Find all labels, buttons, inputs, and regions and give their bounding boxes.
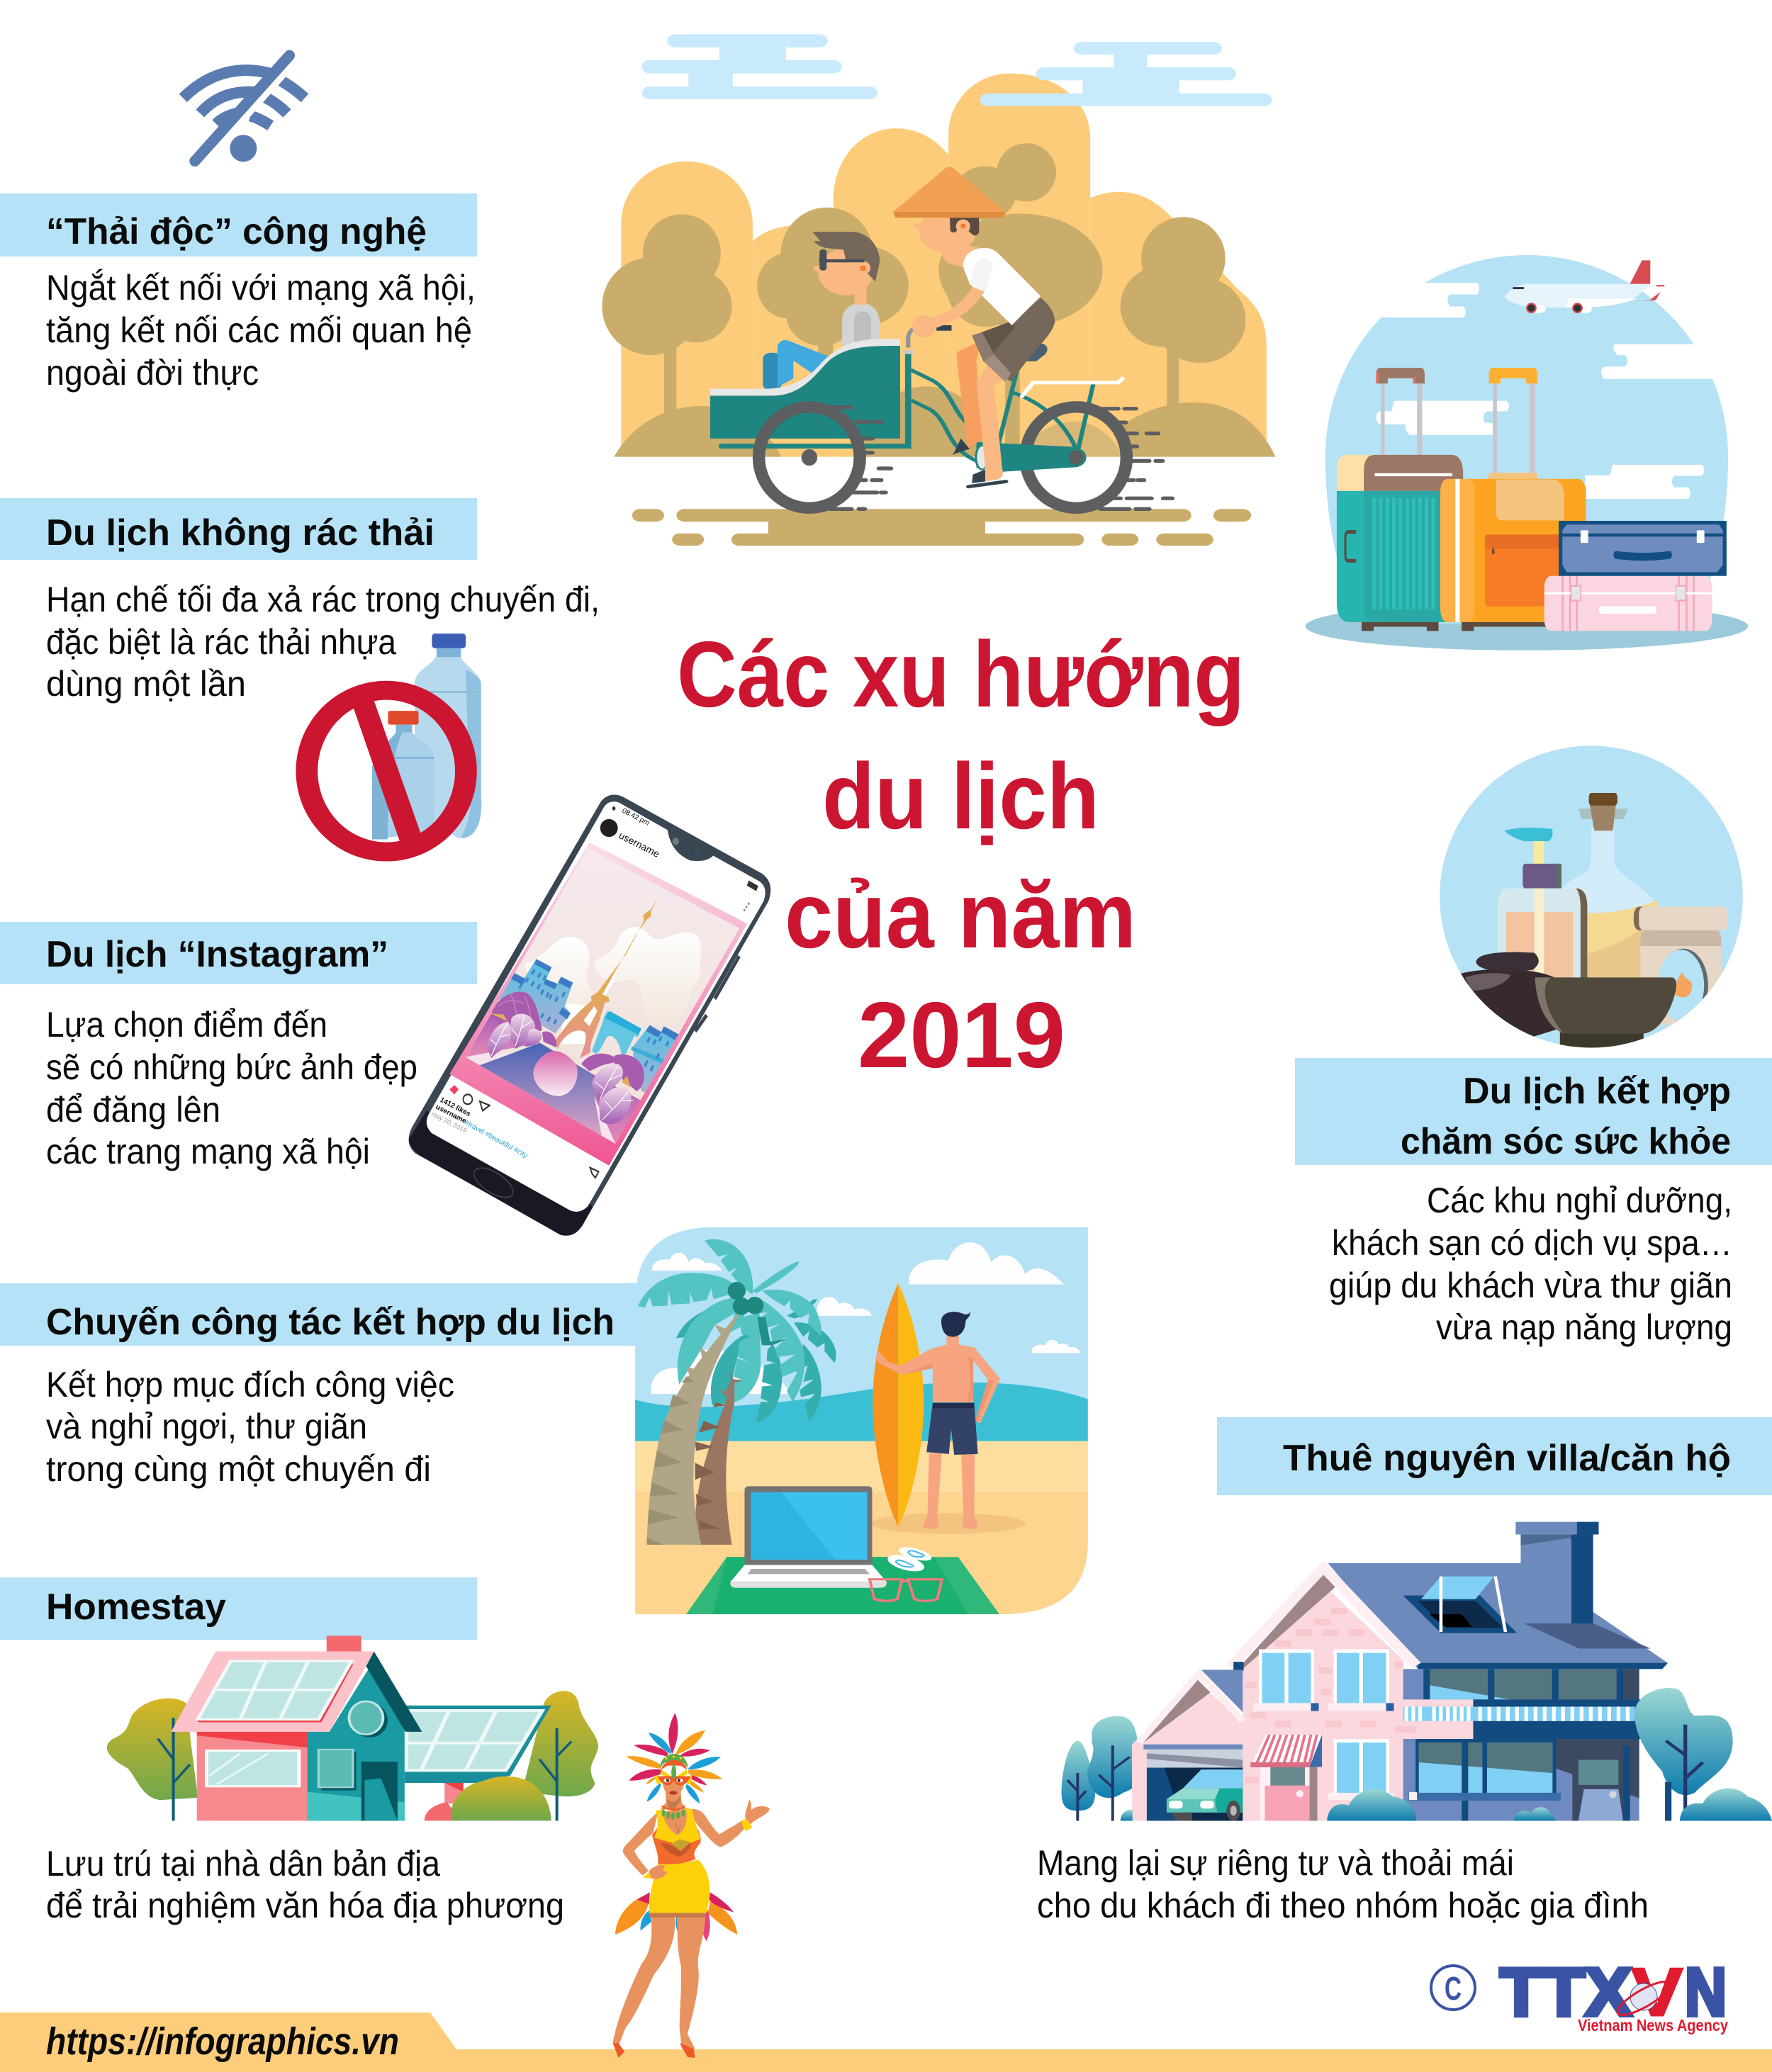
plane (1505, 260, 1664, 313)
footer url: https://infographics.vn (46, 2020, 399, 2063)
panel: homestay (0, 1577, 564, 1925)
skylight (1403, 1577, 1517, 1633)
logo: TTXVN: Vietnam News Agency (1578, 2016, 1728, 2034)
heading: Homestay (46, 1587, 226, 1628)
body text: để trải nghiệm văn hóa địa phương (46, 1886, 564, 1925)
body text (46, 1365, 454, 1489)
flip flops (885, 1544, 933, 1575)
blue case (1559, 521, 1727, 576)
clouds (1352, 272, 1736, 499)
roof (171, 1651, 374, 1732)
phone photo: Paris scene (461, 845, 744, 1153)
body text (1329, 1181, 1732, 1347)
icon: no plastic bottles (296, 634, 481, 862)
body text: ngoài đời thực (46, 353, 259, 393)
main title: của năm (785, 863, 1136, 967)
pump bottle (1498, 828, 1587, 980)
cyclo body (710, 339, 900, 439)
heading: “Thải độc” công nghệ (46, 211, 427, 252)
body text: tăng kết nối các mối quan hệ (46, 310, 472, 350)
body text: khách sạn có dịch vụ spa… (1332, 1223, 1732, 1263)
footer bar (0, 2012, 1772, 2072)
foreground trees (602, 143, 1275, 457)
heading: Du lịch “Instagram” (46, 934, 388, 975)
illustration: smartphone: username (434, 1103, 468, 1125)
candle burner (1634, 907, 1728, 1025)
passenger (763, 232, 880, 390)
roof (1328, 1522, 1668, 1669)
body text: và nghỉ ngơi, thư giãn (46, 1407, 367, 1446)
glasses (870, 1580, 942, 1601)
body text: Các khu nghỉ dưỡng, (1427, 1181, 1732, 1220)
panel: business leisure (0, 1283, 652, 1489)
icon: wifi off (183, 55, 305, 162)
trees left (1062, 1716, 1146, 1820)
main title: 2019 (858, 983, 1065, 1087)
clouds (651, 1242, 1080, 1394)
logo: TTXVN (1500, 1954, 1728, 2034)
heading band (1295, 1058, 1772, 1165)
illustration: spa products (1440, 745, 1743, 1048)
illustration: villa (1062, 1522, 1772, 1820)
illustration: beach with laptop (624, 1219, 1104, 1628)
panel: villa rental (1037, 1417, 1772, 1925)
main right block (1403, 1669, 1639, 1820)
bicycle frame (722, 329, 1123, 461)
body text: giúp du khách vừa thư giãn (1329, 1266, 1732, 1305)
chimney (327, 1635, 361, 1651)
upper glass (1423, 1669, 1639, 1699)
feathers (626, 1713, 722, 1803)
teal suitcase (1337, 368, 1463, 631)
body text: đặc biệt là rác thải nhựa (46, 622, 396, 662)
door and awning (1250, 1735, 1322, 1820)
body text: Lưu trú tại nhà dân bản địa (46, 1844, 440, 1884)
palm fronds (638, 1239, 836, 1422)
heading: chăm sóc sức khỏe (1401, 1121, 1731, 1162)
coconuts (728, 1282, 763, 1315)
heading (1401, 1071, 1731, 1162)
stones (1460, 952, 1557, 1037)
neck and face (661, 1777, 686, 1809)
logo: copyright mark: C (1445, 1970, 1462, 2007)
illustration: smartphone: may 20, 2019 (430, 1110, 468, 1134)
heading: Thuê nguyên villa/căn hộ (1283, 1438, 1731, 1479)
trees and bushes (1121, 1688, 1772, 1820)
legs (613, 1913, 705, 2049)
orange suitcase (1440, 368, 1586, 631)
logo: TTXVN: V (1632, 1954, 1683, 2030)
body text: trong cùng một chuyến đi (46, 1449, 431, 1489)
arms (623, 1800, 770, 1876)
body text (46, 1844, 564, 1925)
body text: cho du khách đi theo nhóm hoặc gia đình (1037, 1886, 1649, 1925)
panel: instagram travel (0, 922, 477, 1171)
trees (107, 1691, 598, 1820)
panel: wellness travel (1295, 1058, 1772, 1347)
pink case (1544, 576, 1712, 631)
balcony (1403, 1699, 1644, 1739)
body text: sẽ có những bức ảnh đẹp (46, 1047, 417, 1087)
illustration: cyclo scene (602, 34, 1275, 546)
skirt feathers (615, 1892, 737, 1941)
body text: Kết hợp mục đích công việc (46, 1365, 454, 1404)
body text (46, 268, 476, 393)
illustration: smartphone: 1412 likes (439, 1096, 472, 1118)
body text: các trang mạng xã hội (46, 1132, 370, 1171)
bowl (1535, 977, 1676, 1048)
body text: Ngắt kết nối với mạng xã hội, (46, 268, 476, 308)
heading: Du lịch kết hợp (1463, 1071, 1731, 1112)
body text: Lựa chọn điểm đến (46, 1005, 327, 1045)
wheels (753, 401, 1133, 514)
logo: TTXVN: TTX (1500, 1954, 1632, 2030)
heading band (0, 922, 477, 984)
body text: vừa nạp năng lượng (1436, 1307, 1732, 1347)
heading band (0, 193, 477, 257)
body text: Hạn chế tối đa xả rác trong chuyến đi, (46, 580, 600, 619)
body text: để đăng lên (46, 1090, 220, 1130)
main title: Các xu hướng (677, 622, 1245, 726)
house walls (197, 1651, 422, 1820)
logo: TTXVN: N (1685, 1954, 1727, 2030)
mat (686, 1557, 999, 1614)
speed lines (830, 407, 1172, 509)
palm trunks (647, 1313, 743, 1545)
dancer upper body (623, 1713, 770, 1879)
panel: digital detox (0, 193, 477, 393)
lower front (1408, 1739, 1639, 1820)
pink facade (1230, 1567, 1416, 1820)
road (632, 509, 1251, 546)
laptop (730, 1486, 887, 1588)
body text (46, 580, 600, 704)
illustration: smartphone (409, 794, 770, 1236)
body text: Mang lại sự riêng tư và thoải mái (1037, 1843, 1514, 1883)
heading band (1217, 1417, 1772, 1495)
heading band (0, 1283, 652, 1346)
main title (677, 622, 1245, 1087)
panel: zero waste travel (0, 498, 600, 704)
illustration: homestay house (107, 1635, 598, 1820)
heading band (0, 1577, 477, 1640)
chain guard (977, 442, 1078, 472)
illustration: smartphone: #travel #beautiful #city (464, 1119, 529, 1160)
body text (46, 1005, 417, 1171)
illustration: smartphone: 08.42 pm (621, 807, 651, 828)
logo: copyright mark (1431, 1966, 1475, 2010)
surfboard (873, 1283, 924, 1527)
facade windows (1253, 1649, 1394, 1800)
surfer (875, 1311, 1000, 1529)
heading band (0, 498, 477, 560)
heading: Chuyến công tác kết hợp du lịch (46, 1302, 615, 1343)
clouds (642, 34, 877, 99)
headdress and mask (654, 1754, 692, 1785)
illustration: luggage and plane (1306, 255, 1748, 651)
rider (893, 167, 1055, 487)
dress (652, 1808, 701, 1864)
body text: dùng một lần (46, 664, 246, 704)
necklace (662, 1806, 685, 1820)
skirt (649, 1859, 710, 1913)
body text (1037, 1843, 1649, 1925)
garage wing (1132, 1670, 1243, 1820)
hand on waist (647, 1865, 668, 1879)
heading: Du lịch không rác thải (46, 512, 434, 553)
solar panel (405, 1706, 551, 1820)
main title: du lịch (822, 744, 1099, 848)
background trees (621, 74, 1267, 457)
illustration: carnival dancer (613, 1713, 770, 2058)
illustration: smartphone: username (617, 829, 662, 860)
oil bottle (1561, 793, 1657, 978)
